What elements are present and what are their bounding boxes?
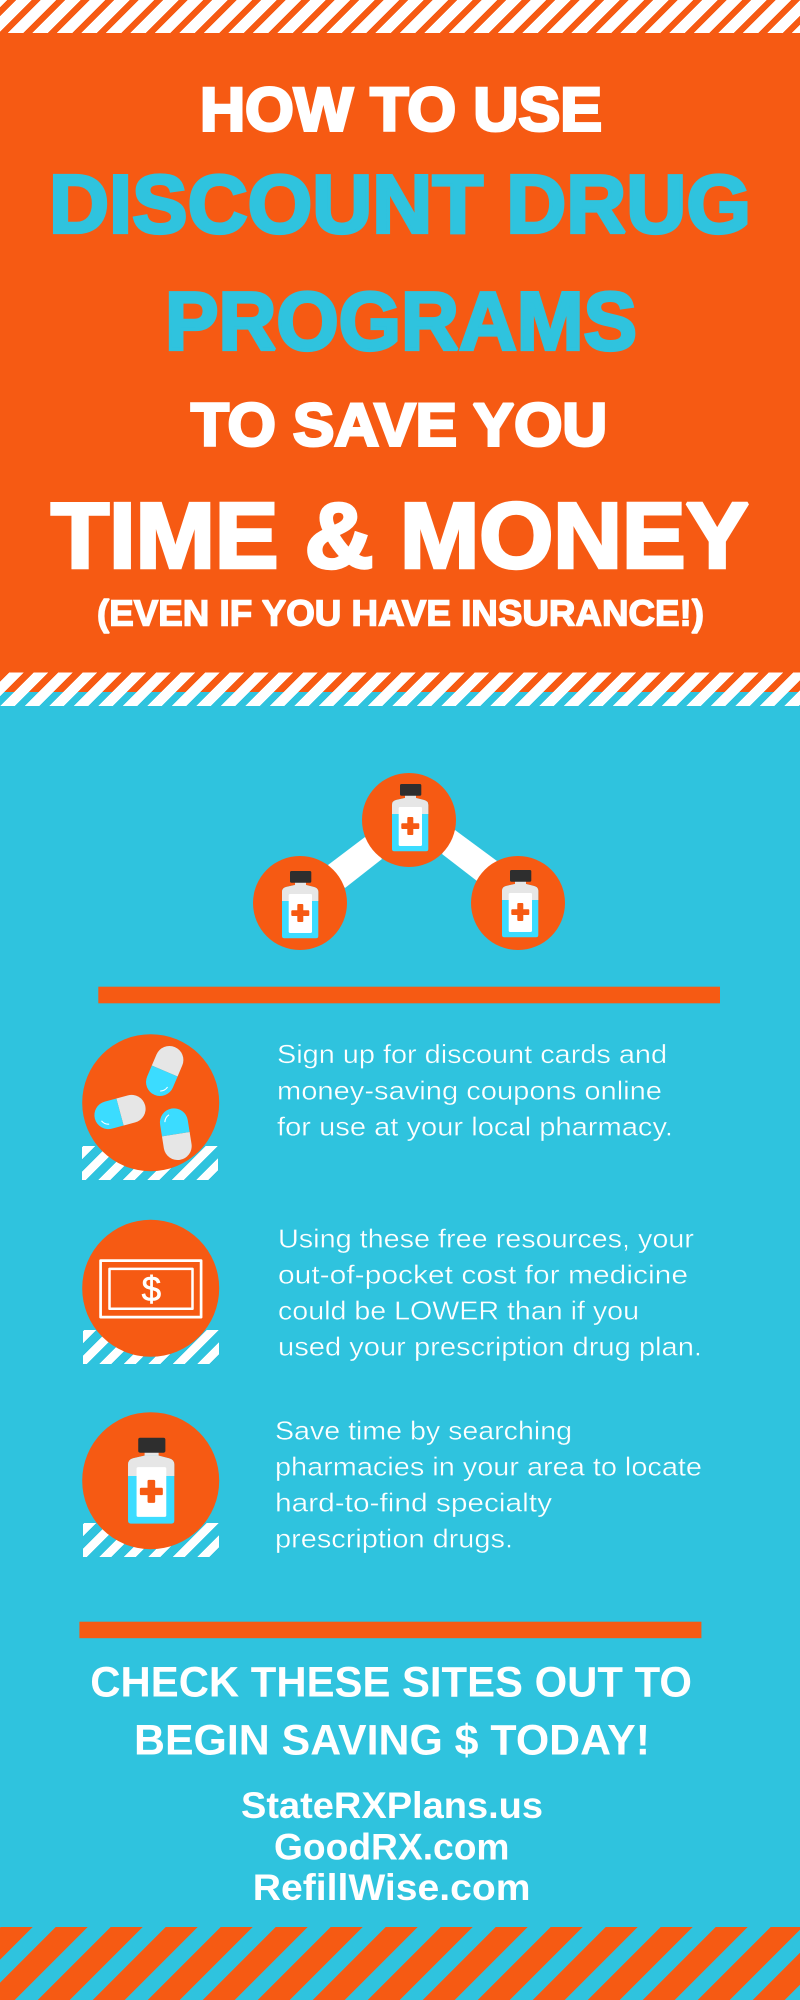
header divider stripe band	[0, 672, 800, 706]
list of websites: StateRXPlans.us	[241, 1785, 543, 1826]
call to action heading: BEGIN SAVING $ TODAY!	[134, 1716, 650, 1764]
text block: free resources	[278, 1223, 702, 1361]
connector: left	[328, 837, 382, 888]
text block: free resources: could be LOWER than if you	[278, 1295, 639, 1325]
icon: medicine bottle	[82, 1412, 219, 1557]
list of websites: GoodRX.com	[274, 1826, 510, 1867]
lower orange divider bar	[79, 1622, 701, 1638]
text block: save time: prescription drugs.	[275, 1523, 513, 1553]
icon: pills	[82, 1034, 219, 1180]
text block: save time: pharmacies in your area to locate	[275, 1451, 702, 1481]
title	[49, 76, 751, 634]
icon: top bottle	[362, 773, 456, 867]
title line: discount drug: DISCOUNT DRUG	[49, 158, 751, 250]
top orange divider bar	[98, 987, 720, 1003]
icon: dollar bill: $	[142, 1270, 161, 1309]
bottom orange stripe band	[0, 1927, 800, 2000]
text block: free resources: Using these free resources, your	[278, 1223, 694, 1253]
call to action heading	[90, 1658, 692, 1764]
text block: save time: hard-to-find specialty	[275, 1487, 552, 1517]
text block: sign up	[277, 1039, 673, 1141]
text block: save time	[275, 1415, 702, 1553]
icon: left bottle	[253, 856, 347, 950]
text block: sign up: for use at your local pharmacy.	[277, 1111, 673, 1141]
icon: right bottle	[471, 856, 565, 950]
title line: time and money: TIME & MONEY	[51, 484, 749, 588]
title line: to save you: TO SAVE YOU	[191, 392, 607, 458]
text block: free resources: out-of-pocket cost for medicine	[278, 1259, 688, 1289]
text block: save time: Save time by searching	[275, 1415, 572, 1445]
icon group: three connected bottles	[253, 773, 565, 950]
title line: programs: PROGRAMS	[165, 274, 637, 368]
call to action heading: CHECK THESE SITES OUT TO	[90, 1658, 692, 1706]
top white stripe band	[0, 0, 800, 33]
text block: free resources: used your prescription drug plan.	[278, 1331, 702, 1361]
connector: right	[442, 830, 497, 881]
subtitle: (EVEN IF YOU HAVE INSURANCE!)	[97, 592, 704, 634]
text block: sign up: money-saving coupons online	[277, 1075, 662, 1105]
title line: how to use: HOW TO USE	[200, 76, 602, 144]
panel: cyan body background	[0, 692, 800, 2000]
panel: orange header background	[0, 0, 800, 692]
list of websites: RefillWise.com	[253, 1867, 531, 1908]
text block: sign up: Sign up for discount cards and	[277, 1039, 667, 1069]
icon: dollar bill	[82, 1220, 219, 1364]
list of websites	[241, 1785, 543, 1908]
